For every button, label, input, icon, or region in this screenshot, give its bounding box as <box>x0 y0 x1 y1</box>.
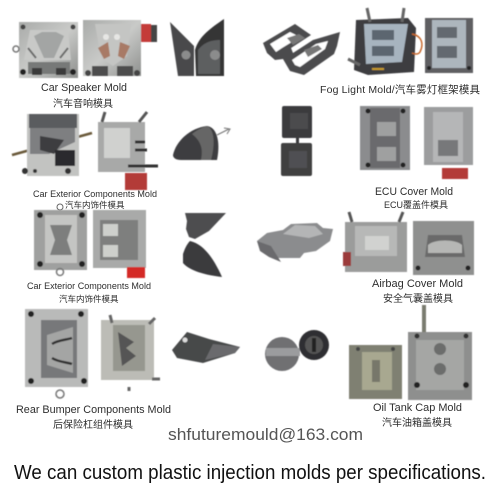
car speaker mold caption <box>41 82 127 110</box>
oil tank cap parts <box>265 330 329 371</box>
rear bumper components mold caption: Rear Bumper Components Mold <box>16 404 171 416</box>
car exterior components mold 2 caption: 汽车内饰件模具 <box>59 294 119 304</box>
ECU cover mold, left half <box>360 106 410 170</box>
rear bumper components mold, left half <box>25 309 88 398</box>
ECU cover mold caption: ECU Cover Mold <box>375 186 453 198</box>
car exterior components mold 2 caption: Car Exterior Components Mold <box>27 281 151 291</box>
car exterior components mold 1 caption: 汽车内饰件模具 <box>65 200 125 210</box>
ECU cover mold caption <box>375 186 453 210</box>
car exterior components mold 1, left half <box>12 114 92 176</box>
car exterior components mold 2, right half <box>93 210 146 278</box>
airbag cover mold, right half <box>413 221 474 275</box>
oil tank cap mold caption: 汽车油箱盖模具 <box>382 416 452 429</box>
contact email: shfuturemould@163.com <box>168 426 363 444</box>
oil tank cap mold, right half <box>408 305 472 400</box>
fog light mold, left half <box>348 8 422 75</box>
car speaker mold, left half <box>13 22 78 78</box>
ECU cover mold caption: ECU覆盖件模具 <box>384 199 448 210</box>
car speaker part <box>170 19 224 76</box>
airbag cover mold caption: 安全气囊盖模具 <box>383 292 453 305</box>
car speaker mold caption: Car Speaker Mold <box>41 82 127 94</box>
rear bumper components mold caption: 后保险杠组件模具 <box>53 418 133 431</box>
oil tank cap mold caption <box>373 402 462 429</box>
rear bumper part <box>172 332 240 363</box>
rear bumper components mold, right half <box>101 315 160 391</box>
airbag cover mold caption <box>372 278 463 305</box>
airbag cover mold, left half <box>343 212 407 272</box>
car exterior part: mirror shell <box>173 126 230 160</box>
car speaker mold, right half <box>83 20 157 76</box>
rear bumper components mold caption <box>16 404 171 431</box>
fog light part <box>263 24 340 75</box>
car exterior part: trim pieces <box>183 213 226 277</box>
car speaker mold caption: 汽车音响模具 <box>53 97 113 110</box>
car exterior components mold 2 caption <box>27 281 151 304</box>
car exterior components mold 1 caption <box>33 189 157 210</box>
airbag cover mold caption: Airbag Cover Mold <box>372 278 463 290</box>
fog light mold caption: Fog Light Mold/汽车雾灯框架模具 <box>320 83 480 96</box>
ECU cover mold, right half <box>424 107 473 179</box>
fog light mold, right half <box>425 18 473 73</box>
ECU cover part <box>281 106 312 176</box>
oil tank cap mold, left half <box>349 345 402 399</box>
airbag cover part <box>257 223 333 262</box>
car exterior components mold 2, left half <box>34 210 87 276</box>
car exterior components mold 1, right half <box>98 112 158 190</box>
car exterior components mold 1 caption: Car Exterior Components Mold <box>33 189 157 199</box>
oil tank cap mold caption: Oil Tank Cap Mold <box>373 402 462 414</box>
